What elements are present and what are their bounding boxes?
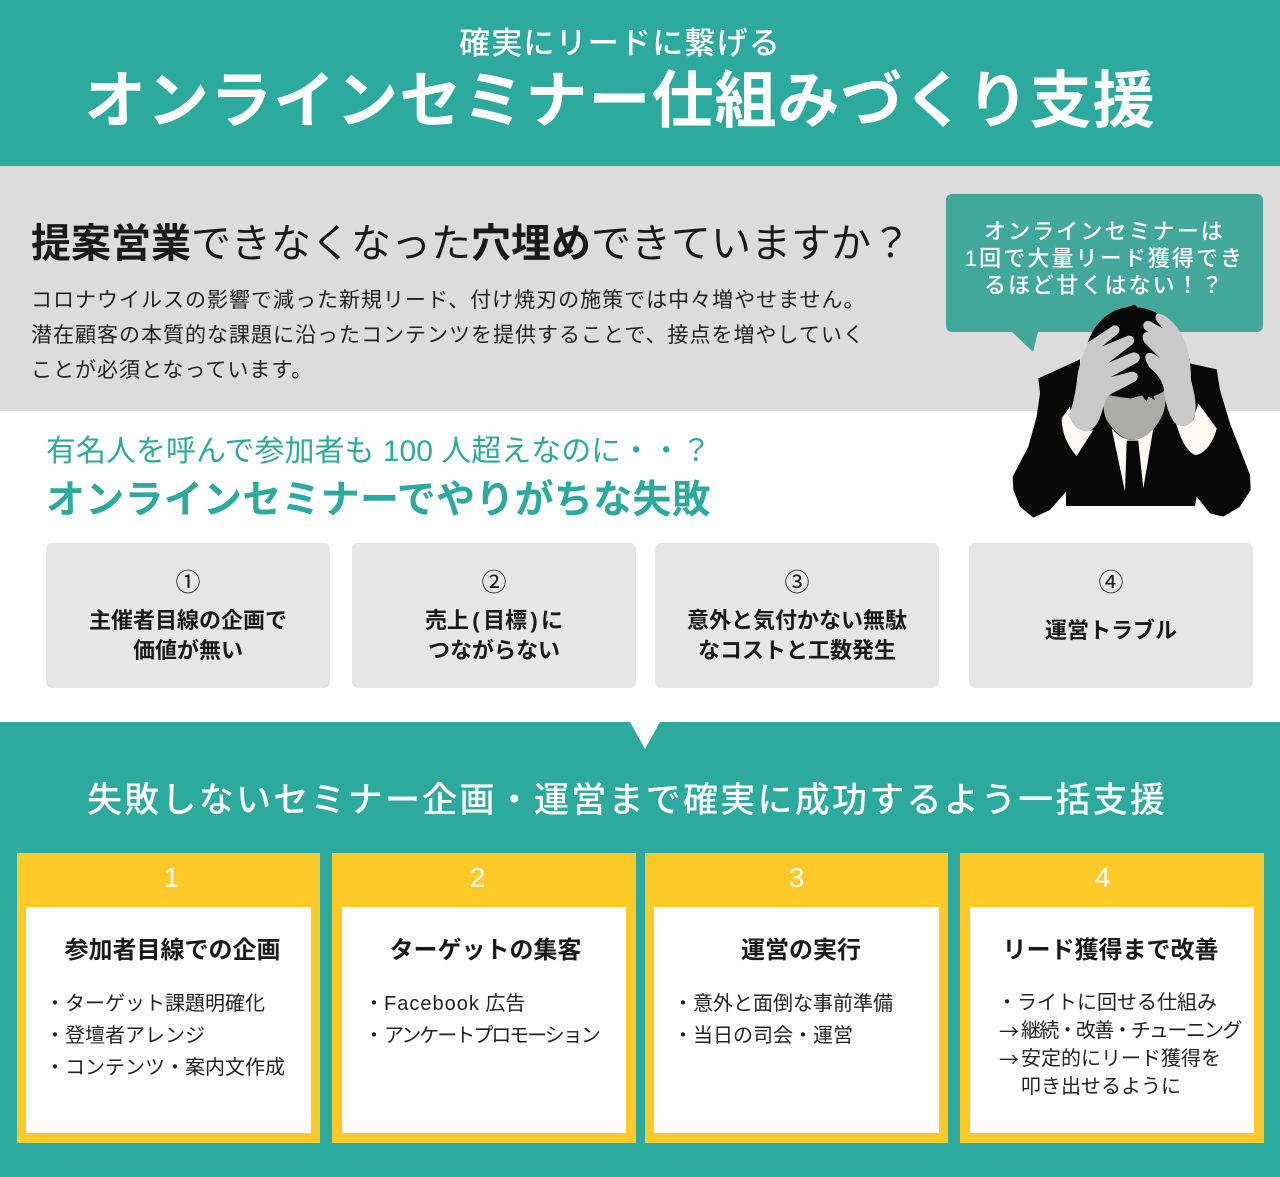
- problem heading: 提案営業できなくなった穴埋めできていますか？: [31, 222, 911, 266]
- panel: step 1: 参加者目線での企画: [64, 937, 280, 964]
- panel: step 4: →: [999, 1016, 1019, 1045]
- panel: step 2: ・アンケートプロモーション: [364, 1025, 599, 1047]
- panel: step 2: 2: [470, 862, 485, 893]
- panel: step 4: ・ライトに回せる仕組み: [997, 992, 1217, 1014]
- panel: failure 2: つながらない: [428, 638, 560, 663]
- problem text: コロナウイルスの影響で減った新規リード、付け焼刃の施策では中々増やせません。: [31, 289, 866, 312]
- panel: problem statement: [0, 166, 1280, 411]
- failure heading: オンラインセミナーでやりがちな失敗: [46, 479, 711, 522]
- main title: オンラインセミナー仕組みづくり支援: [84, 67, 1156, 136]
- panel: failure 2: [352, 543, 636, 688]
- panel: failure 3: ③: [784, 569, 810, 597]
- panel: step 4: 継続・改善・チューニング: [1021, 1020, 1241, 1042]
- panel: step 2: [332, 853, 636, 1143]
- problem text: 潜在顧客の本質的な課題に沿ったコンテンツを提供することで、接点を増やしていく: [31, 324, 865, 347]
- panel: step 3: [645, 853, 948, 1143]
- arrow: pointer notch: [630, 722, 660, 749]
- callout: speech bubble: るほど甘くはない！？: [984, 273, 1225, 298]
- panel: failure 4: 運営トラブル: [1045, 618, 1177, 643]
- support heading: 失敗しないセミナー企画・運営まで確実に成功するよう一括支援: [87, 781, 1167, 820]
- panel: step 1: 1: [164, 862, 179, 893]
- panel: failure 4: [969, 543, 1253, 688]
- problem text: [31, 289, 866, 382]
- panel: failure 2: ②: [481, 569, 506, 597]
- panel: step 3: 運営の実行: [741, 937, 861, 964]
- panel: failure 4: ④: [1098, 569, 1124, 597]
- icon: distressed businessman: [1012, 304, 1251, 518]
- panel: step 3: ・意外と面倒な事前準備: [673, 993, 893, 1015]
- panel: failure 1: 主催者目線の企画で: [89, 608, 287, 633]
- panel: step 3: ・当日の司会・運営: [673, 1025, 853, 1047]
- panel: failure 3: [655, 543, 939, 688]
- panel: step 4: [960, 853, 1264, 1143]
- header band: [0, 0, 1280, 166]
- panel: failure 1: ①: [175, 569, 200, 597]
- panel: step 4: 4: [1095, 862, 1110, 893]
- panel: step 2: ターゲットの集客: [390, 937, 582, 964]
- panel: failure 1: [46, 543, 330, 688]
- subtitle: 確実にリードに繋げる: [459, 26, 781, 61]
- panel: step 1: [17, 853, 320, 1143]
- panel: step 4: リード獲得まで改善: [1002, 937, 1218, 964]
- panel: step 4: →: [999, 1044, 1019, 1073]
- panel: failure 3: なコストと工数発生: [698, 638, 896, 663]
- problem text: ことが必須となっています。: [31, 359, 313, 382]
- panel: support section: [0, 722, 1280, 1177]
- callout: speech bubble: オンラインセミナーは: [984, 219, 1225, 244]
- panel: failure 3: 意外と気付かない無駄: [687, 608, 907, 633]
- panel: step 4: 叩き出せるように: [1021, 1076, 1181, 1098]
- panel: step 1: ・登壇者アレンジ: [45, 1025, 205, 1047]
- panel: failure 2: 売上 ( 目標 ) に: [425, 608, 563, 633]
- panel: step 1: ・コンテンツ・案内文作成: [45, 1057, 285, 1079]
- panel: step 3: 3: [789, 862, 804, 893]
- panel: step 1: ・ターゲット課題明確化: [45, 993, 265, 1015]
- failure lead-in text: 有名人を呼んで参加者も 100 人超えなのに・・？: [46, 435, 711, 468]
- panel: step 4: 安定的にリード獲得を: [1021, 1048, 1221, 1070]
- callout: speech bubble: 1回で大量リード獲得でき: [965, 246, 1244, 271]
- panel: failure 1: 価値が無い: [133, 638, 243, 663]
- callout: speech bubble: [946, 194, 1263, 352]
- panel: step 2: ・Facebook 広告: [364, 993, 525, 1015]
